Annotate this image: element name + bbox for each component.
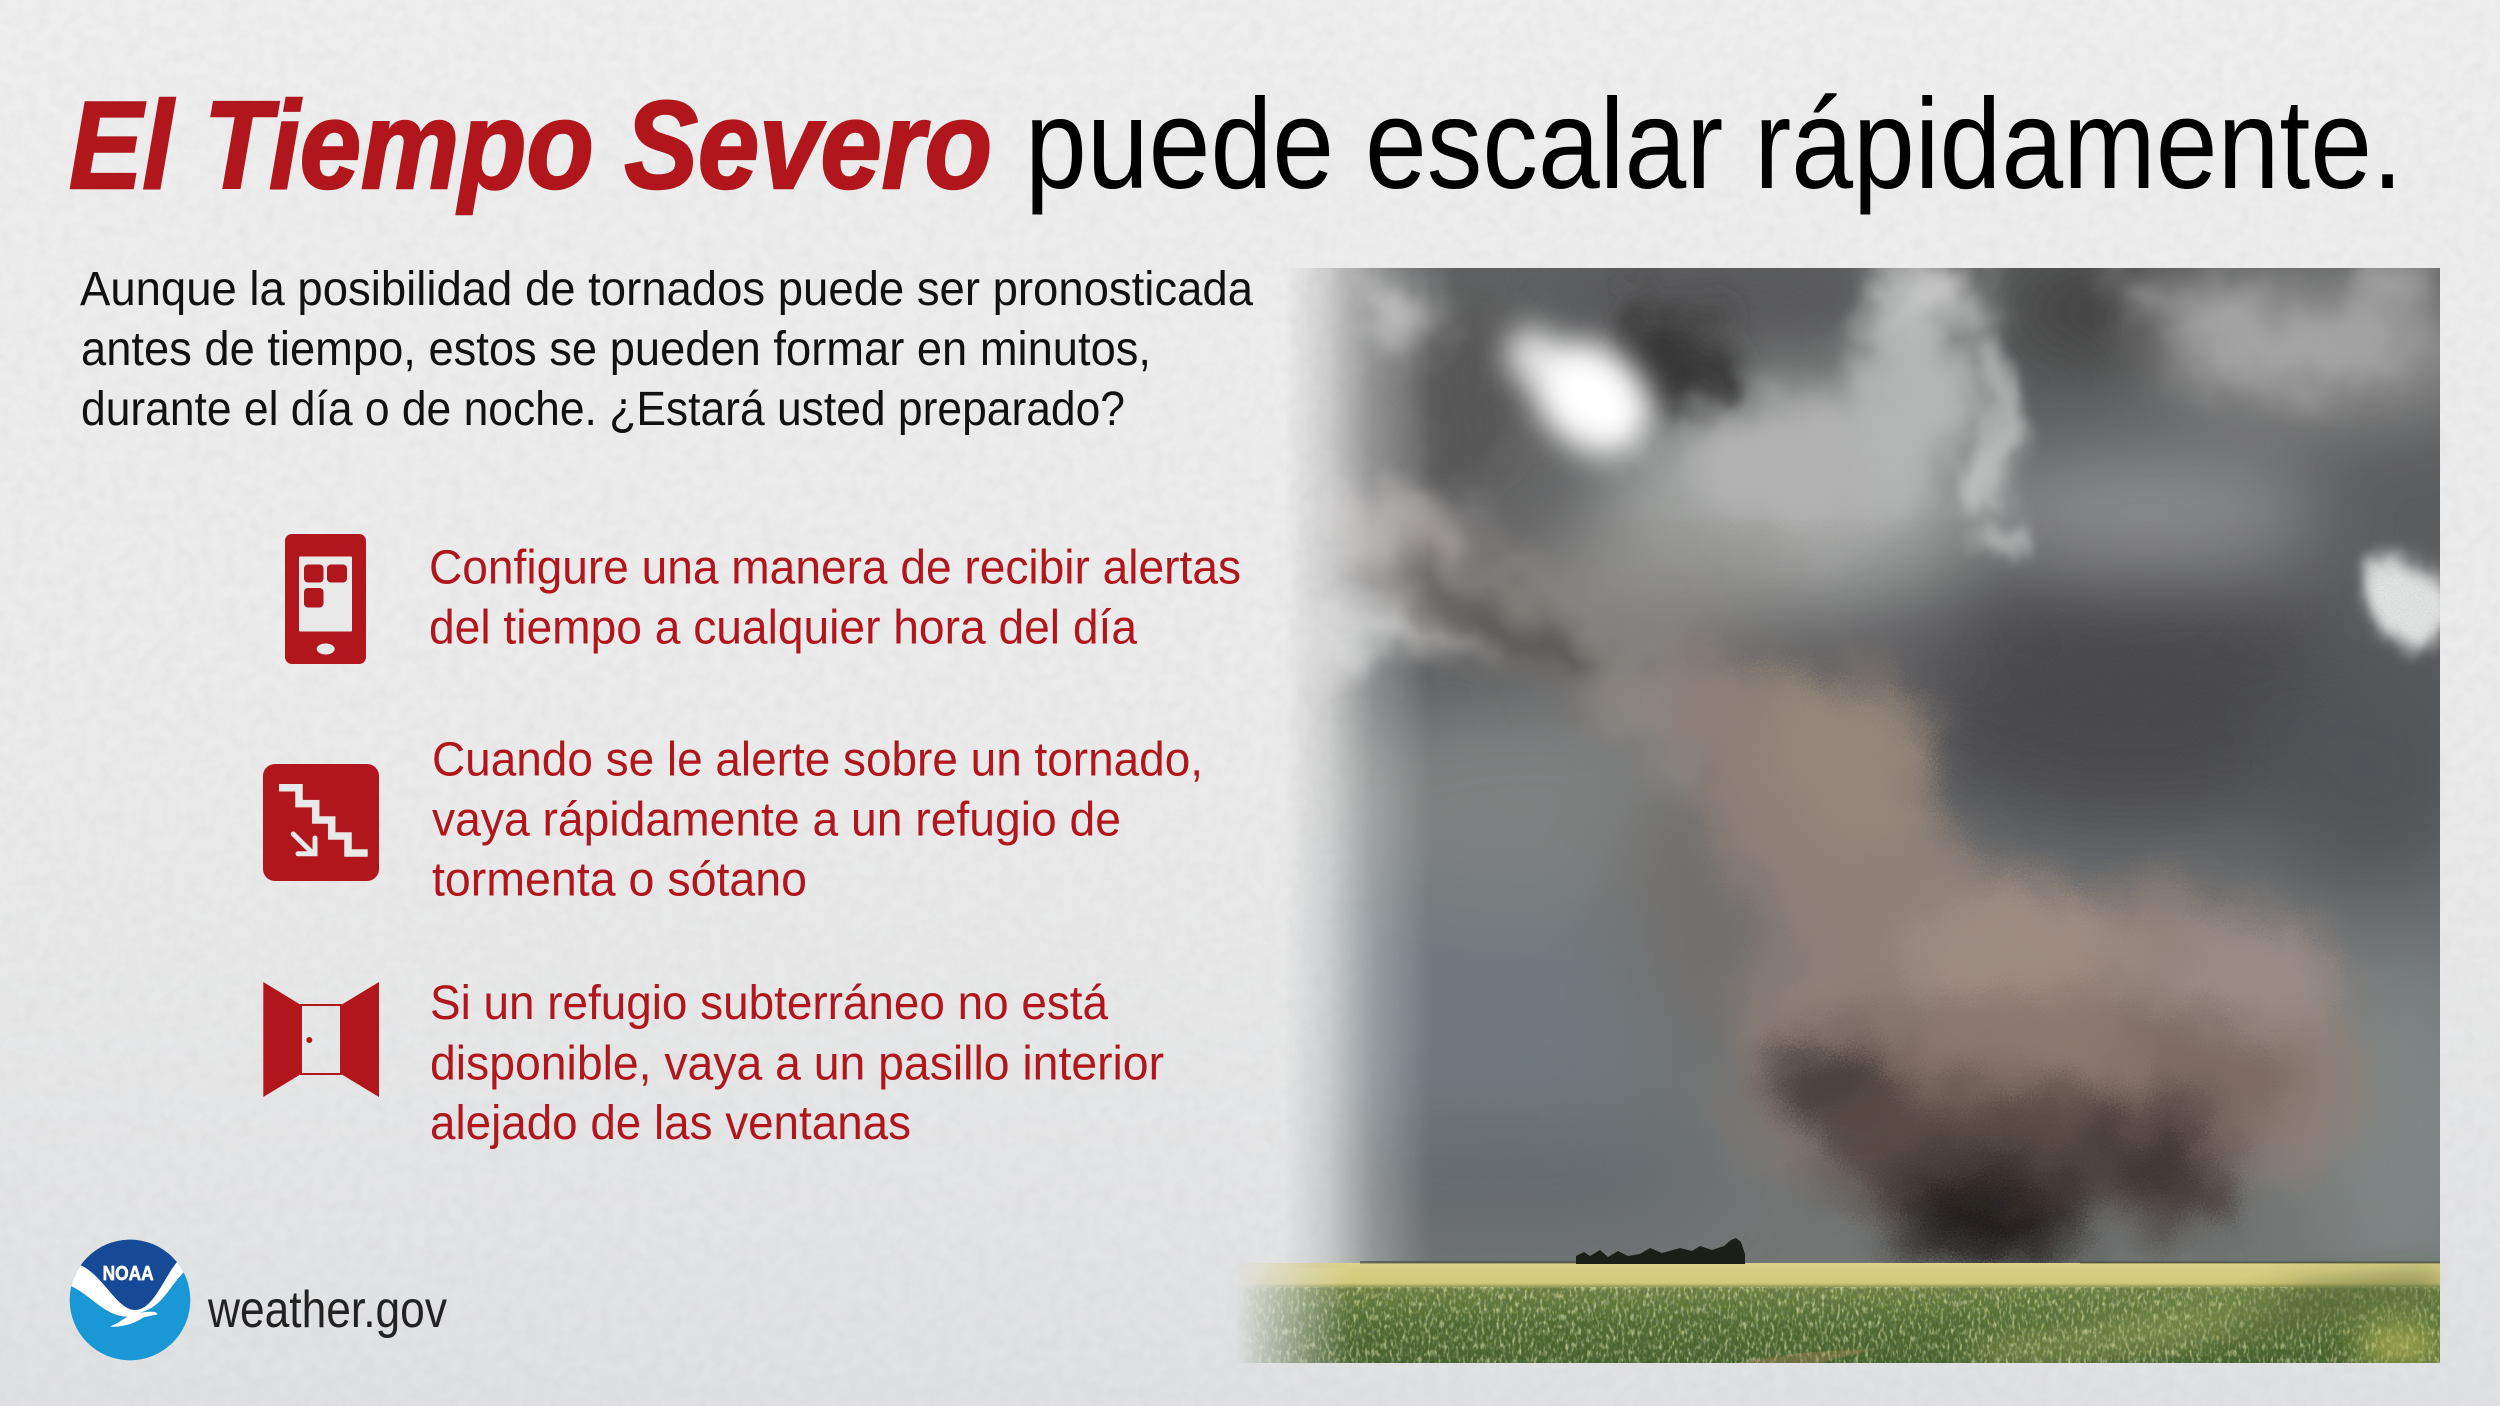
intro text block: Aunque la posibilidad de tornados puede ser pronosticada — [80, 263, 1253, 316]
tip 3 text: Si un refugio subterráneo no está — [430, 977, 1108, 1030]
tip 3 text: disponible, vaya a un pasillo interior — [430, 1038, 1164, 1090]
white bird swoosh — [67, 1257, 187, 1327]
tip 2 text — [432, 734, 1203, 906]
intro text block: antes de tiempo, estos se pueden formar en minutos, — [81, 323, 1151, 376]
tip 1 text: Configure una manera de recibir alertas — [429, 542, 1241, 594]
title — [69, 73, 2403, 216]
bright gap in clouds — [1506, 317, 1675, 479]
tip 1 text — [429, 542, 1241, 654]
intro text block: durante el día o de noche. ¿Estará usted preparado? — [81, 383, 1125, 436]
tip 2 text: tormenta o sótano — [432, 854, 807, 906]
storm sky — [1296, 268, 2440, 1263]
icon: smartphone — [285, 534, 366, 664]
tip 3 text: alejado de las ventanas — [430, 1097, 911, 1150]
rotating arm of cloud — [1310, 491, 1760, 780]
tree line — [1576, 1238, 1745, 1264]
tip 2 text: Cuando se le alerte sobre un tornado, — [432, 734, 1203, 786]
website label: weather.gov — [207, 1281, 447, 1339]
dust column — [1660, 635, 2370, 1272]
title: El Tiempo Severo — [69, 77, 992, 215]
tip 2 text: vaya rápidamente a un refugio de — [432, 794, 1121, 846]
icon: door in interior hallway — [263, 982, 379, 1097]
tip 1 text: del tiempo a cualquier hora del día — [429, 602, 1137, 654]
tip 3 text — [430, 977, 1164, 1150]
NOAA logo — [67, 1230, 190, 1360]
NOAA logo: NOAA — [103, 1262, 154, 1285]
intro text block — [80, 263, 1253, 436]
icon: stairs going down — [263, 764, 379, 881]
green field and horizon — [1200, 1238, 2445, 1365]
photo: tornado over a green field — [1200, 255, 2500, 1365]
